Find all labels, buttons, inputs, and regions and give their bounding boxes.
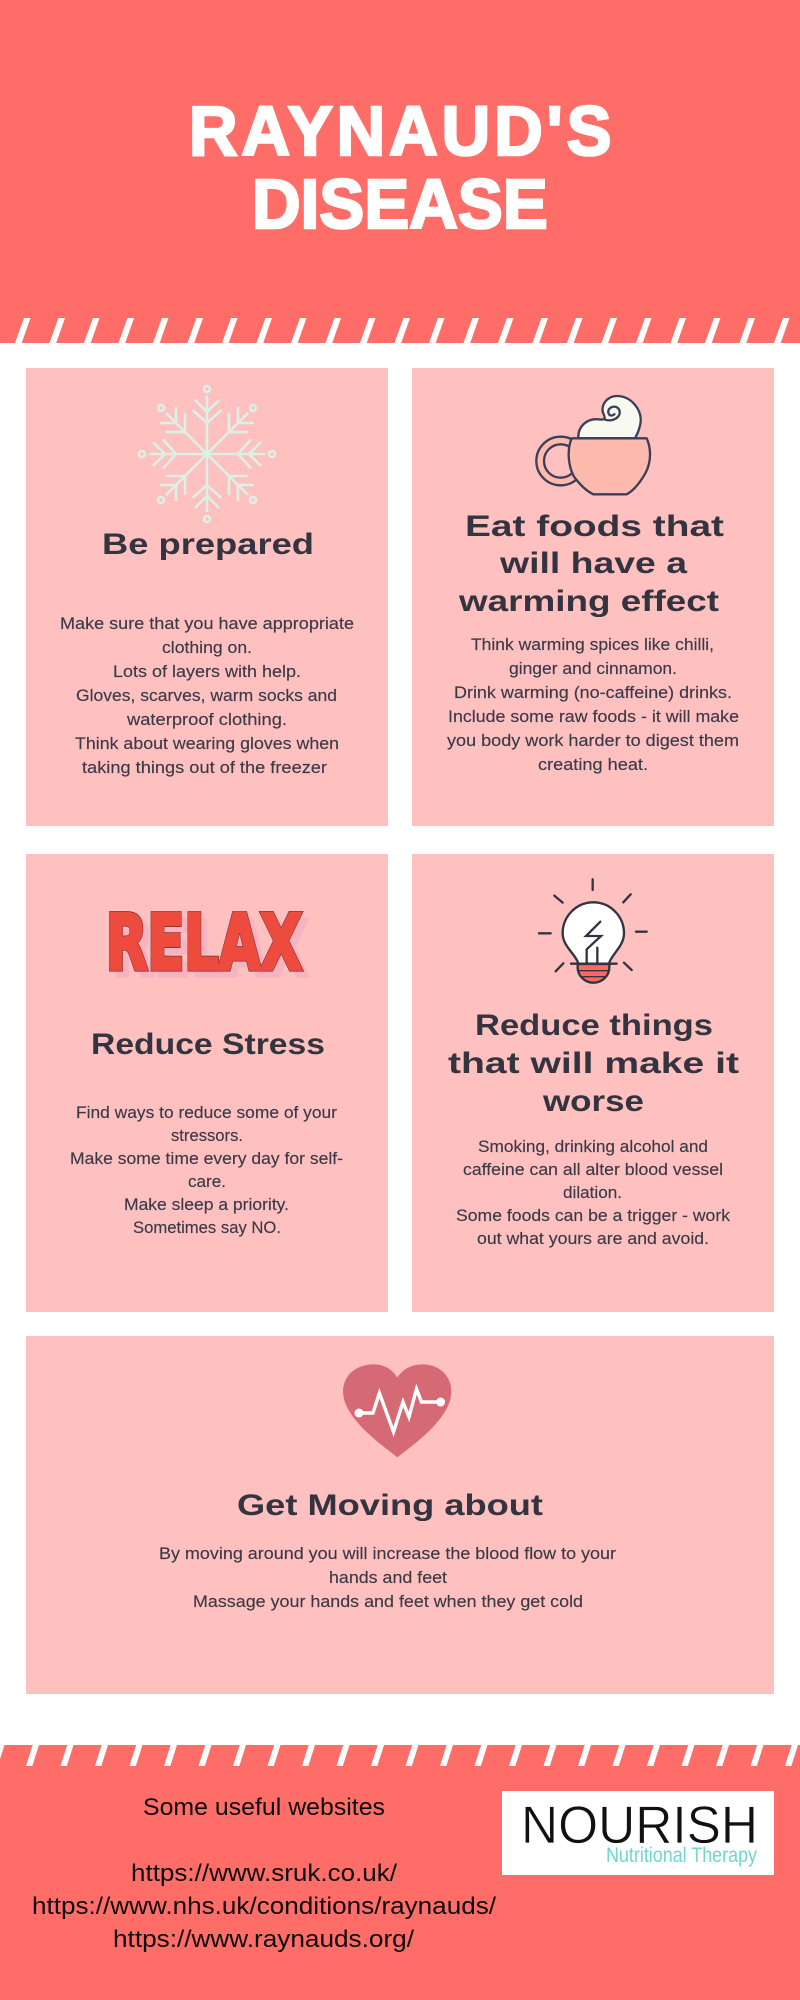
logo: nourish: Nutritional Therapy [606, 1844, 757, 1867]
text: reduce triggers body: Smoking, drinking alcohol and [478, 1137, 708, 1156]
icon: relax lettering: RELAX [112, 904, 308, 994]
text: useful websites: https://www.sruk.co.uk/ [131, 1860, 397, 1887]
icon: light bulb [539, 879, 647, 983]
panel: get moving [26, 1336, 774, 1694]
logo: nourish: NOURISH [521, 1796, 758, 1855]
text: reduce stress body: care. [188, 1172, 226, 1191]
text: reduce triggers body: dilation. [563, 1183, 622, 1202]
text: reduce stress body: Make some time every day for self- [70, 1149, 343, 1168]
text: be prepared body: Gloves, scarves, warm socks and [76, 686, 337, 705]
footer band [0, 1745, 800, 2000]
icon: relax lettering: RELAX [106, 898, 302, 987]
heading: warming foods: Eat foods that [465, 510, 724, 543]
text: be prepared body: Make sure that you have appropriate [60, 614, 354, 633]
text: reduce triggers body [456, 1137, 731, 1248]
text: reduce stress body: Sometimes say NO. [133, 1218, 281, 1237]
text: reduce stress body: stressors. [171, 1126, 243, 1145]
text: get moving body: Massage your hands and feet when they get cold [193, 1592, 583, 1611]
text: get moving body [159, 1544, 616, 1611]
text: be prepared body [60, 614, 354, 777]
title: RAYNAUD'S [189, 92, 611, 170]
logo: nourish [502, 1791, 774, 1875]
heading: warming foods [458, 510, 724, 618]
text: warming foods body: Think warming spices like chilli, [471, 635, 714, 654]
text: reduce stress body [70, 1103, 343, 1237]
heading: reduce stress: Reduce Stress [91, 1028, 325, 1061]
icon: relax lettering [106, 898, 308, 994]
heading: reduce triggers [448, 1009, 739, 1118]
text: reduce stress body: Find ways to reduce some of your [76, 1103, 337, 1122]
heading: warming foods: warming effect [458, 585, 719, 618]
icon: cup with cream [536, 396, 650, 494]
text: reduce triggers body: caffeine can all alter blood vessel [463, 1160, 723, 1179]
title [189, 92, 611, 243]
heading: reduce triggers: Reduce things [475, 1009, 713, 1042]
text: warming foods body: creating heat. [538, 755, 648, 774]
text: useful websites: https://www.nhs.uk/conditions/raynauds/ [32, 1893, 496, 1920]
text: reduce stress body: Make sleep a priority. [124, 1195, 289, 1214]
text: reduce triggers body: Some foods can be a trigger - work [456, 1206, 731, 1225]
text: be prepared body: Think about wearing gloves when [75, 734, 339, 753]
title: DISEASE [252, 165, 548, 243]
text: be prepared body: taking things out of the freezer [82, 758, 327, 777]
heading: warming foods: will have a [499, 547, 687, 580]
icon: heart with pulse [343, 1364, 451, 1457]
text: be prepared body: waterproof clothing. [126, 710, 287, 729]
text: useful websites: https://www.raynauds.org/ [113, 1926, 414, 1953]
text: get moving body: hands and feet [329, 1568, 447, 1587]
panel: reduce triggers [412, 854, 774, 1312]
text: warming foods body [447, 635, 739, 774]
text: useful websites [32, 1794, 496, 1953]
text: warming foods body: Drink warming (no-caffeine) drinks. [454, 683, 732, 702]
text: reduce triggers body: out what yours are and avoid. [477, 1229, 709, 1248]
heading: be prepared: Be prepared [102, 528, 314, 561]
icon: relax lettering: RELAX [106, 898, 302, 987]
text: warming foods body: ginger and cinnamon. [509, 659, 677, 678]
text: warming foods body: Include some raw foods - it will make [448, 707, 739, 726]
text: be prepared body: Lots of layers with help. [113, 662, 301, 681]
icon: snowflake [139, 386, 275, 522]
heading: reduce triggers: that will make it [448, 1047, 739, 1080]
panel: warming foods [412, 368, 774, 826]
heading: get moving: Get Moving about [237, 1489, 543, 1522]
text: be prepared body: clothing on. [162, 638, 252, 657]
panel: be prepared [26, 368, 388, 826]
text: warming foods body: you body work harder to digest them [447, 731, 739, 750]
text: useful websites: Some useful websites [143, 1794, 385, 1821]
heading: reduce triggers: worse [542, 1085, 644, 1118]
header band [0, 0, 800, 343]
panel: reduce stress [26, 854, 388, 1312]
text: get moving body: By moving around you will increase the blood flow to your [159, 1544, 616, 1563]
